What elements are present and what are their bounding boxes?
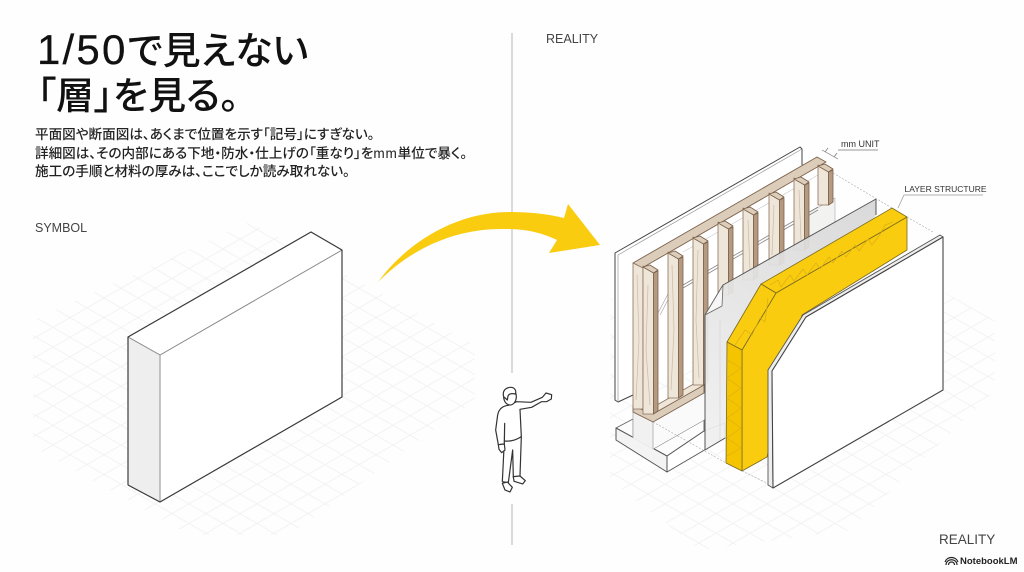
person pointing [496, 387, 552, 492]
sill plate [633, 378, 704, 422]
NotebookLM icon [945, 558, 958, 565]
label: reality bottom: REALITY [939, 532, 995, 547]
grid: symbol floor [33, 222, 475, 535]
body text: 施工の手順と材料の厚みは、ここでしか読み取れない。 [35, 164, 350, 179]
label: symbol: SYMBOL [35, 221, 87, 235]
insulation layer: yellow [726, 208, 907, 471]
membrane layer [705, 199, 876, 450]
top plate [633, 157, 826, 268]
title [37, 26, 308, 118]
finish panel [768, 235, 943, 488]
symbol wall: plain box [128, 232, 342, 502]
body text: 平面図や断面図は、あくまで位置を示す「記号」にすぎない。 [35, 127, 374, 142]
studs [633, 164, 833, 414]
annotation: layer structure [898, 184, 987, 208]
arrow: symbol to reality [378, 204, 600, 282]
detailed wall: exploded layers [615, 139, 987, 488]
label: reality top: REALITY [546, 32, 598, 46]
framing backing and blocking [658, 175, 835, 315]
dotted projection lines [653, 173, 933, 483]
body text: 詳細図は、その内部にある下地・防水・仕上げの「重なり」をmm単位で暴く。 [35, 146, 467, 161]
grid: reality floor [610, 215, 995, 550]
notebooklm mark: NotebookLM [960, 556, 1018, 567]
title: 1/50で見えない [37, 26, 308, 73]
body text [35, 127, 467, 179]
annotation: mm unit: mm UNIT [841, 139, 880, 149]
annotation: mm unit [822, 139, 880, 159]
divider line [511, 33, 513, 545]
annotation: layer structure: LAYER STRUCTURE [904, 184, 987, 194]
title: 「層」を見る。 [37, 76, 239, 118]
foundation [616, 393, 725, 472]
back board [615, 147, 802, 402]
